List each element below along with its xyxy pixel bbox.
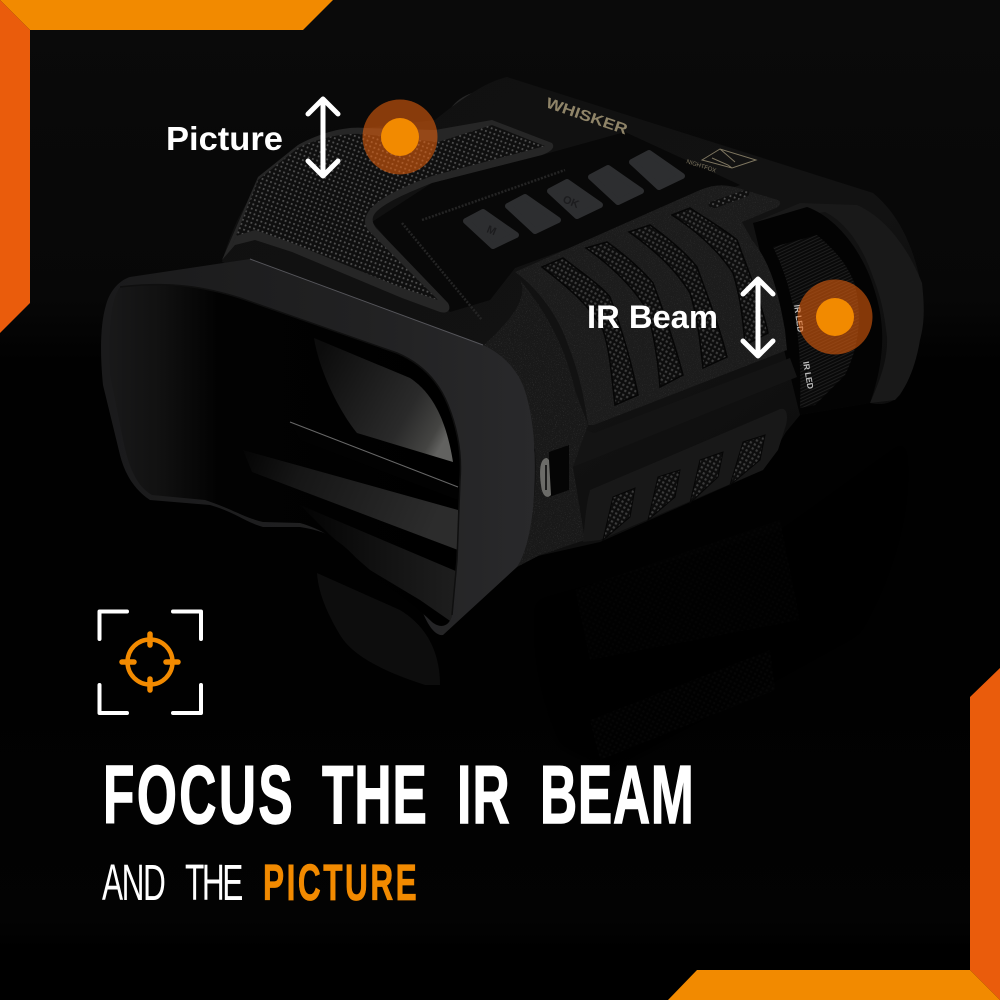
subheading word: And: AND bbox=[102, 854, 166, 911]
body corner pebbled highlight bbox=[484, 280, 588, 567]
WHISKER brand mark: WHISKER bbox=[544, 95, 630, 139]
grip slider bbox=[708, 190, 750, 208]
eyecup inner cavity bbox=[142, 286, 460, 626]
callout: IR Beam bbox=[587, 279, 872, 356]
button tray recess bbox=[372, 132, 740, 312]
display screen bbox=[314, 338, 453, 462]
button labels bbox=[485, 194, 581, 238]
callout: Picture bbox=[166, 99, 438, 176]
heading: Focus the IR Beam bbox=[103, 747, 694, 841]
control buttons bbox=[466, 153, 682, 246]
heading: Focus the IR Beam: BEAM bbox=[540, 747, 694, 841]
reflection of device on glossy surface bbox=[317, 440, 909, 770]
lit shelf bbox=[256, 456, 458, 550]
lens interior bbox=[753, 207, 882, 415]
textured top panel rim bbox=[222, 120, 553, 313]
crosshair bbox=[122, 634, 178, 690]
corner: left orange-red bar bbox=[0, 0, 30, 333]
corner: bottom orange bar bbox=[668, 970, 1000, 1000]
lower grip dotted pads bbox=[603, 435, 765, 540]
eyecup rim edge line bbox=[120, 285, 460, 615]
button labels: OK bbox=[561, 194, 581, 211]
corner: right orange-red bar bbox=[970, 668, 1000, 1000]
NightFox logo: NIGHTFOX bbox=[685, 159, 717, 174]
arrow: IR beam up/down bbox=[743, 279, 773, 356]
heading: Focus the IR Beam: THE bbox=[322, 747, 427, 841]
strap lug bbox=[540, 445, 569, 497]
marker: IR beam focus point bbox=[798, 280, 872, 354]
arrow: picture up/down bbox=[308, 99, 338, 176]
focus ring with ribbing bbox=[773, 235, 859, 408]
lens ring labels bbox=[792, 304, 816, 390]
lower grip bbox=[583, 409, 787, 542]
label: IR Beam: IR Beam bbox=[587, 299, 718, 335]
NightFox logo bbox=[685, 149, 756, 174]
heading: Focus the IR Beam: FOCUS bbox=[103, 747, 293, 841]
marker: picture focus point bbox=[362, 100, 438, 174]
button labels: M bbox=[485, 224, 498, 238]
tray groove speckle bbox=[402, 170, 565, 320]
subheading: And the Picture bbox=[102, 854, 417, 911]
subheading word: The: THE bbox=[185, 854, 243, 911]
icon: focus target bbox=[100, 612, 201, 713]
textured top panel dots bbox=[228, 125, 545, 300]
grip rib strips bbox=[542, 208, 768, 405]
main body bbox=[222, 77, 923, 567]
lower cavity floor bbox=[334, 520, 456, 620]
viewfinder brackets bbox=[100, 612, 201, 713]
lower body band bbox=[573, 358, 797, 467]
rubber eyecup outer bbox=[101, 259, 535, 635]
side grip panel bbox=[515, 185, 787, 425]
corner: top orange bar bbox=[0, 0, 333, 30]
lens ring labels: IR LED bbox=[801, 361, 816, 390]
eyepiece knob bbox=[447, 90, 520, 125]
lens hood ring bbox=[753, 203, 924, 403]
heading: Focus the IR Beam: IR bbox=[457, 747, 510, 841]
product: night-vision binocular bbox=[100, 77, 924, 640]
display rails bbox=[290, 422, 458, 500]
subheading accent: Picture: PICTURE bbox=[263, 854, 417, 911]
lens ring labels: IR LED bbox=[792, 304, 806, 333]
label: Picture: Picture bbox=[166, 120, 283, 157]
